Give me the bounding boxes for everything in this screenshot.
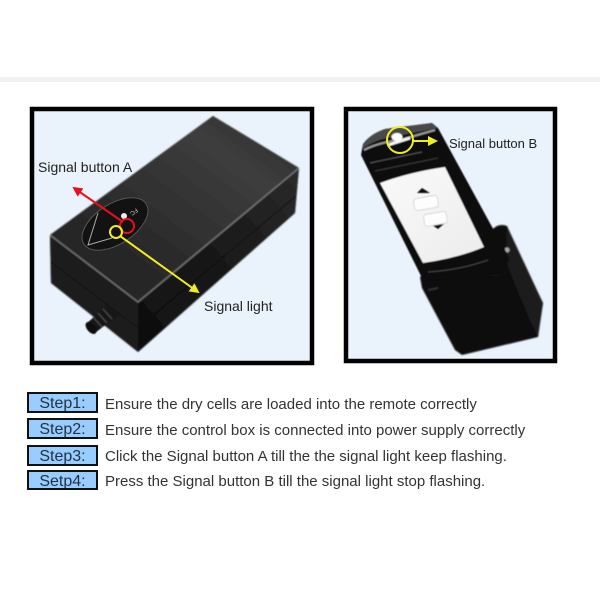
step 3 badge	[27, 445, 98, 466]
step 4 text: Press the Signal button B till the signal light stop flashing.	[105, 473, 485, 490]
remote body	[361, 123, 509, 280]
step 2 text: Ensure the control box is connected into power supply correctly	[105, 422, 525, 439]
step 2 badge: Step2:	[39, 421, 86, 438]
step 3 text: Click the Signal button A till the the signal light keep flashing.	[105, 448, 507, 465]
step 3 badge: Step3:	[39, 448, 86, 465]
step 1 text: Ensure the dry cells are loaded into the remote correctly	[105, 396, 477, 413]
label: signal button A: Signal button A	[38, 159, 133, 175]
top divider band	[0, 77, 600, 82]
remote holder	[420, 225, 543, 355]
panel: control box photo	[32, 109, 312, 363]
step 1 badge	[27, 392, 98, 413]
step 2 badge	[27, 418, 98, 439]
oval label	[73, 187, 157, 261]
label: signal light: Signal light	[204, 298, 273, 314]
control box body	[50, 116, 299, 352]
step 1 badge: Step1:	[39, 395, 86, 412]
red arrow and circle: button A	[74, 188, 134, 233]
oval label: FC	[128, 206, 138, 216]
cable connector	[83, 305, 118, 336]
yellow arrow and circle: signal light	[110, 226, 198, 292]
step 4 badge: Setp4:	[39, 473, 86, 490]
yellow circle and arrow: button B	[387, 127, 436, 153]
label: signal button B: Signal button B	[449, 136, 537, 151]
remote buttons	[413, 188, 448, 229]
panel: remote photo	[346, 109, 555, 361]
step 4 badge	[27, 470, 98, 490]
